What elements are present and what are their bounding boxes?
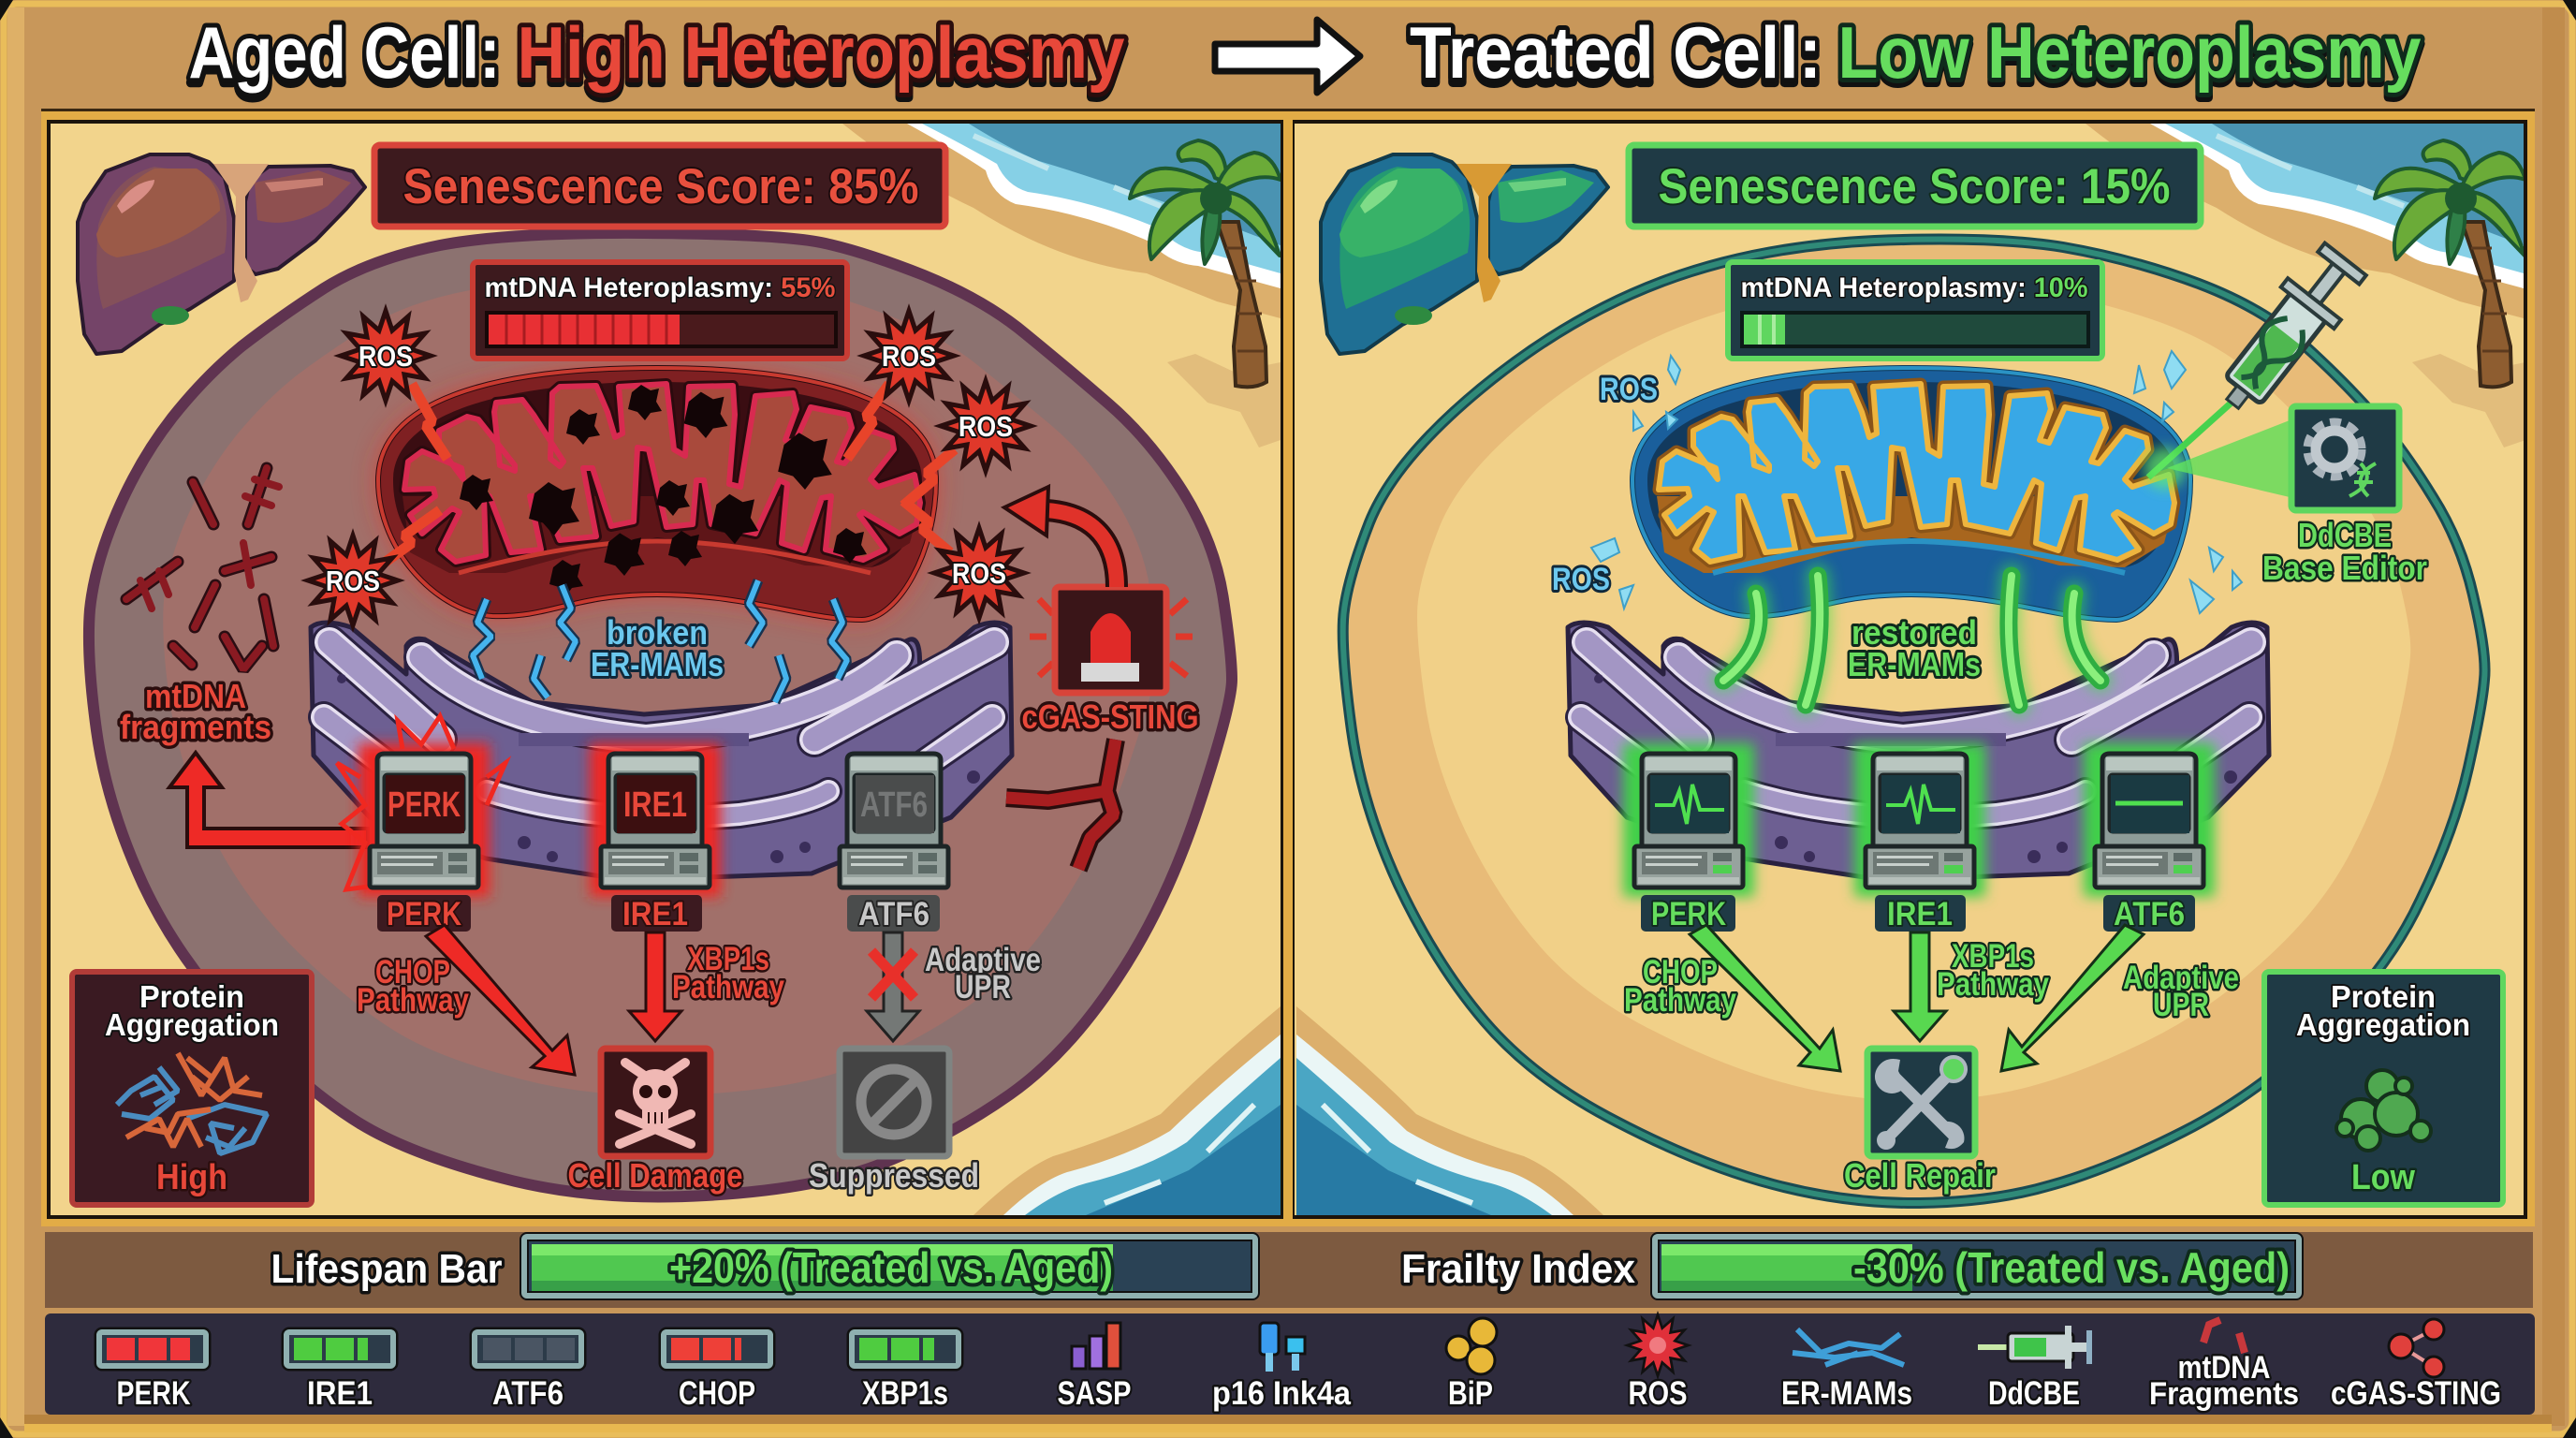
ecg [1655,785,1724,824]
score badge: senescence aged: Senescence Score: 85% [402,159,919,214]
terminal: IRE1 aged [590,743,721,897]
ros burst 2: ROS [882,340,936,373]
label: adaptive UPR aged: Adaptive [925,942,1041,978]
label: cGAS-STING: cGAS-STING [1022,697,1198,736]
arrow: XBP1s pathway treated [1894,932,1946,1041]
arrow: CHOP pathway aged [426,925,575,1075]
arrow: aged to treated [1215,20,1360,93]
ros burst 4 [308,536,398,625]
stat: lifespan bar: Lifespan Bar [271,1246,502,1292]
title: treated cell low heteroplasmy: Low Heteroplasmy [1838,11,2421,94]
ros burst 2 [864,311,954,401]
arrow: cGAS-STING curved [1004,487,1117,587]
box: protein aggregation low: Aggregation [2296,1007,2470,1042]
ros burst 3: ROS [959,410,1013,443]
tag: IRE1 treated: IRE1 [1887,896,1953,932]
label: DdCBE base editor: Base Editor [2262,549,2427,587]
legend: mtDNA fragments: Fragments [2149,1376,2299,1412]
icon: syringe [2206,239,2372,424]
stats bar background [45,1232,2533,1308]
cell body: treated [1343,240,2485,1203]
legend: PERK [99,1332,206,1412]
legend: PERK: PERK [116,1375,191,1412]
gauge: mtDNA heteroplasmy 10: mtDNA Heteroplasmy: 10% [1741,272,2087,303]
label: XBP1s pathway treated: Pathway [1937,966,2049,1003]
terminal: ATF6 off: ATF6 [860,785,928,825]
stat: lifespan bar [271,1237,1255,1296]
box: protein aggregation low: Protein [2331,979,2436,1014]
box: protein aggregation high: Aggregation [105,1007,279,1042]
legend: cGAS-STING [2331,1319,2501,1412]
ER: aged [311,623,1012,880]
legend: XBP1s [852,1332,959,1412]
terminal: IRE1 aged: IRE1 [623,785,687,825]
label: adaptive UPR treated: Adaptive [2123,960,2239,996]
label: DdCBE base editor: DdCBE [2298,516,2392,554]
tag: PERK aged: PERK [387,896,461,932]
damage spots [460,385,867,595]
gauge: mtDNA heteroplasmy 10 [1728,262,2102,359]
title: treated cell low heteroplasmy: Treated Cell: [1410,11,1822,94]
icon: dna [2349,463,2376,496]
icon: suppressed [840,1049,949,1156]
bottom frame strip [24,1415,2552,1432]
legend: cGAS-STING: cGAS-STING [2331,1375,2501,1412]
tan divider [45,1308,2533,1313]
ros burst 1 [341,311,431,401]
icon: skull cell damage [601,1049,710,1156]
terminal: PERK aged: PERK [388,785,461,825]
legend: BiP [1446,1318,1497,1412]
label: adaptive UPR treated [2123,960,2239,1023]
divider between panels [1283,120,1293,1221]
label: DdCBE base editor [2262,516,2427,587]
panel frame [41,109,2535,1226]
legend: p16 Ink4a [1212,1323,1351,1412]
panel: treated cell [1295,124,2525,1215]
stat: frailty index: -30% (Treated vs. Aged) [1853,1243,2290,1292]
cGAS-STING alarm [1030,587,1193,693]
label: restored ER-MAMs: restored [1852,613,1977,652]
icon: wrench cell repair [1867,1049,1975,1156]
legend: IRE1: IRE1 [307,1375,373,1412]
ros burst 5: ROS [952,557,1006,590]
box: DdCBE base editor [2291,406,2399,510]
ros burst 1: ROS [359,340,413,373]
scenery: beach water [842,124,1281,1215]
terminal: ATF6 treated [2084,743,2215,897]
legend: mtDNA fragments: mtDNA [2177,1350,2271,1386]
label: XBP1s pathway treated [1937,938,2049,1003]
arrow: PERK to mtDNA fragments [169,753,368,847]
box: protein aggregation high: Protein [139,979,244,1014]
tag: ATF6 treated: ATF6 [2114,896,2185,932]
terminal: PERK treated [1623,743,1754,897]
tag: ATF6 aged: ATF6 [858,896,929,932]
label: suppressed: Suppressed [809,1156,979,1195]
label: adaptive UPR aged [925,942,1041,1005]
box: protein aggregation low [2264,972,2503,1205]
terminal: ATF6 off [840,754,948,888]
legend: ROS: ROS [1629,1375,1687,1412]
legend: CHOP: CHOP [679,1375,755,1412]
protein clump [2336,1070,2431,1151]
protein clump [117,1053,267,1153]
title: aged cell high heteroplasmy [189,11,1125,94]
score badge: senescence treated [1629,145,2201,227]
glow: mitochondrion [378,368,936,620]
red x [871,951,915,998]
ecg [1886,785,1955,824]
label: mtDNA fragments: fragments [120,708,271,746]
cell body: aged [89,233,1232,1196]
arrow: adaptive UPR suppressed [867,932,919,1041]
stat: frailty index: Frailty Index [1401,1246,1636,1292]
label: restored ER-MAMs: ER-MAMs [1848,645,1981,683]
label: CHOP pathway aged: Pathway [357,982,469,1019]
box: protein aggregation high: High [156,1158,227,1197]
terminal: PERK aged [337,716,505,897]
legend: ROS [1627,1314,1689,1412]
liver: treated [1321,154,1608,354]
box: protein aggregation low: Low [2351,1158,2415,1197]
label: broken ER-MAMs [591,613,724,683]
label: broken ER-MAMs: broken [607,613,708,652]
label: CHOP pathway treated: Pathway [1624,982,1736,1019]
ros burst 5 [934,528,1024,618]
legend: BiP: BiP [1448,1375,1493,1412]
scenery: beach water [1296,124,2524,1215]
legend: p16 Ink4a: p16 Ink4a [1212,1375,1351,1412]
legend: XBP1s: XBP1s [862,1375,948,1412]
label: broken ER-MAMs: ER-MAMs [591,645,724,683]
legend: ER-MAMs: ER-MAMs [1781,1375,1912,1412]
flat line [2115,801,2183,805]
mtDNA fragments pieces [126,468,279,669]
legend panel [45,1313,2535,1415]
label: CHOP pathway aged: CHOP [375,954,450,990]
tag: IRE1 aged: IRE1 [622,896,688,932]
title: aged cell high heteroplasmy: High Heteroplasmy [517,11,1125,94]
label: ROS bottom: ROS [1552,562,1610,597]
score badge: senescence aged [374,145,945,227]
legend: SASP: SASP [1058,1375,1131,1412]
label: XBP1s pathway aged: XBP1s [687,941,769,977]
stat: lifespan bar: +20% (Treated vs. Aged) [669,1243,1113,1292]
panel: aged cell [51,124,1281,1215]
liver: aged [78,154,365,354]
ros bolts [379,384,955,566]
scenery: palm tree [1130,140,1281,448]
label: restored ER-MAMs [1848,613,1981,683]
legend: CHOP [664,1332,770,1412]
legend: ATF6: ATF6 [492,1375,564,1412]
label: CHOP pathway treated [1624,954,1736,1019]
tag: PERK treated: PERK [1651,896,1726,932]
legend: ATF6 [475,1332,581,1412]
label: CHOP pathway treated: CHOP [1643,954,1718,990]
scenery: palm tree [2375,140,2525,448]
arrow: XBP1s pathway aged [629,932,681,1041]
broken ER-MAMs strands [473,580,847,702]
label: XBP1s pathway aged: Pathway [672,969,784,1005]
mitochondrion: healthy [1632,368,2190,620]
ros burst 4: ROS [326,565,380,597]
label: ROS top: ROS [1600,372,1658,407]
ER: treated [1568,623,2269,880]
title: treated cell low heteroplasmy [1410,11,2421,94]
icon: gear [2309,424,2360,475]
gauge: mtDNA heteroplasmy 55 [473,262,847,359]
ros crystals [1591,351,2242,613]
label: adaptive UPR treated: UPR [2153,987,2209,1023]
gauge: mtDNA heteroplasmy 55: mtDNA Heteroplasmy: 55% [485,272,835,303]
needle beam [2148,402,2232,477]
score badge: senescence treated: Senescence Score: 15% [1659,159,2170,214]
cracks below cGAS-STING [1006,740,1116,869]
legend: SASP [1058,1323,1131,1412]
mitochondrion: damaged [378,368,936,620]
label: XBP1s pathway treated: XBP1s [1952,938,2034,975]
label: cell repair: Cell Repair [1844,1156,1996,1195]
label: CHOP pathway aged [357,954,469,1019]
legend: DdCBE [1978,1326,2092,1412]
terminal: IRE1 treated [1854,743,1985,897]
legend: ER-MAMs [1781,1329,1912,1412]
label: XBP1s pathway aged [672,941,784,1005]
arrow: adaptive UPR treated [2001,925,2144,1071]
label: mtDNA fragments: mtDNA [145,677,246,715]
ros burst 3 [941,381,1031,471]
label: adaptive UPR aged: UPR [955,969,1011,1005]
beam: base editor green cone [2167,420,2290,497]
restored ER-MAMs strands [1723,576,2100,705]
legend: DdCBE: DdCBE [1988,1375,2080,1412]
title: aged cell high heteroplasmy: Aged Cell: [189,11,500,94]
arrow: CHOP pathway treated [1690,925,1840,1071]
box: protein aggregation high [72,972,312,1205]
label: mtDNA fragments [120,677,271,746]
label: cell damage: Cell Damage [567,1156,743,1195]
legend: mtDNA fragments [2149,1320,2299,1412]
legend: IRE1 [286,1332,393,1412]
stat: frailty index [1401,1237,2299,1296]
